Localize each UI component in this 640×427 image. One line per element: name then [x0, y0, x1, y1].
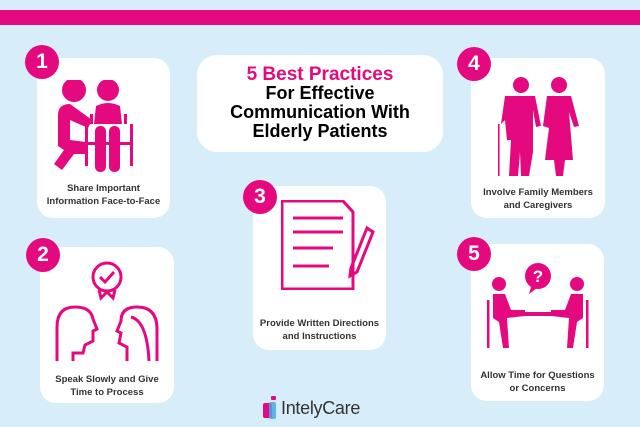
caption 2: Speak Slowly and Give: [55, 374, 159, 385]
icon: two people at table with question: ?: [533, 267, 543, 286]
caption 1: [47, 183, 160, 207]
caption 3: Provide Written Directions: [260, 318, 379, 329]
badge 4: [457, 47, 491, 81]
title text: Communication With: [230, 102, 410, 122]
panel: card 5: [471, 244, 604, 401]
caption 4: [483, 187, 593, 211]
caption 5: [480, 370, 595, 394]
caption 1: Share Important: [67, 183, 140, 194]
panel: title: [197, 55, 443, 152]
icon: speech bubble and two heads: [56, 262, 158, 362]
caption 5: Allow Time for Questions: [480, 370, 595, 381]
title text: 5 Best Practices: [247, 64, 393, 85]
badge 2: [26, 238, 60, 272]
panel: card 3: [253, 186, 386, 350]
title text: [230, 64, 410, 141]
badge 5: [457, 237, 491, 271]
badge 1: 1: [36, 50, 48, 73]
icon: elderly couple: [498, 77, 579, 176]
title text: For Effective: [265, 83, 375, 103]
icon: document with pencil: [281, 200, 375, 290]
title text: Elderly Patients: [252, 121, 388, 141]
logo mark: [263, 396, 276, 419]
badge 2: 2: [37, 243, 49, 266]
panel: card 2: [40, 247, 174, 403]
caption 4: Involve Family Members: [483, 187, 593, 198]
badge 1: [25, 45, 59, 79]
caption 2: Time to Process: [70, 387, 144, 398]
badge 4: 4: [468, 52, 480, 75]
panel: card 4: [471, 58, 605, 218]
logo: IntelyCare: [263, 396, 360, 419]
caption 1: Information Face-to-Face: [47, 196, 160, 207]
caption 4: and Caregivers: [504, 200, 572, 211]
caption 3: [260, 318, 379, 342]
badge 5: 5: [468, 242, 480, 265]
caption 2: [55, 374, 159, 398]
logo text: IntelyCare: [281, 398, 360, 418]
panel: card 1: [37, 58, 170, 218]
caption 3: and Instructions: [283, 331, 356, 342]
badge 3: [243, 180, 277, 214]
caption 5: or Concerns: [510, 383, 565, 394]
icon: caregiver with wheelchair patient: [54, 80, 133, 172]
badge 3: 3: [254, 185, 266, 208]
icon: two people at table with question: [487, 263, 588, 348]
